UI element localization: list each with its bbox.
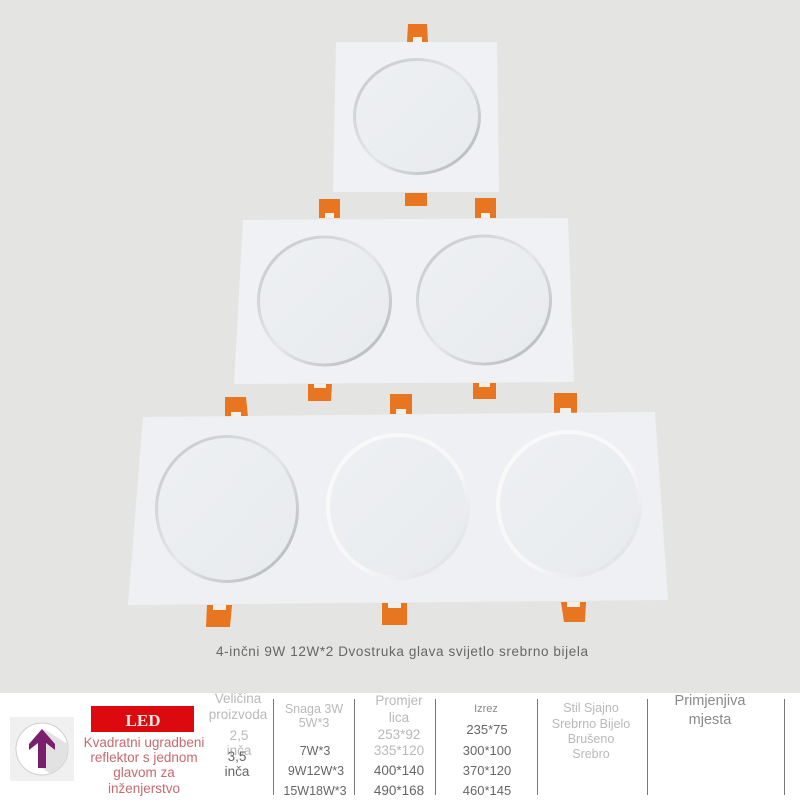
column: product size: inča — [225, 764, 250, 779]
lamp: triple head — [128, 393, 668, 627]
column: face diameter: 253*92 — [378, 727, 420, 742]
column: face diameter — [374, 693, 424, 798]
product description: inženjerstvo — [108, 781, 180, 796]
clip tabs — [206, 393, 586, 627]
column: cutout: 300*100 — [463, 743, 511, 758]
column: product size: inča — [227, 743, 252, 758]
column: product size: proizvoda — [209, 707, 268, 722]
column: applicable places: mjesta — [689, 712, 732, 728]
product caption: 4-inčni 9W 12W*2 Dvostruka glava svijetlo srebrno bijela — [216, 644, 588, 659]
column: style: Srebro — [572, 747, 610, 761]
column: product size: 3,5 — [228, 749, 246, 764]
lamp: double head — [234, 198, 574, 401]
bottom spec strip — [0, 691, 800, 800]
column: cutout: 235*75 — [466, 722, 508, 737]
column: product size: 2,5 — [230, 728, 248, 743]
clip tabs — [405, 24, 428, 206]
column: cutout — [463, 703, 511, 798]
column: style — [552, 701, 630, 761]
product description: glavom za — [113, 765, 175, 780]
column: cutout: Izrez — [474, 703, 498, 715]
column: power — [283, 702, 347, 798]
lamp: single head — [333, 24, 499, 206]
product description: reflektor s jednom — [90, 750, 198, 765]
column: applicable places — [675, 693, 746, 728]
column: face diameter: 400*140 — [374, 763, 424, 778]
column: product size: Veličina — [215, 691, 262, 706]
column: cutout: 460*145 — [463, 783, 511, 798]
column: power: 7W*3 — [300, 744, 330, 758]
product description — [84, 735, 204, 796]
LED red label — [91, 706, 194, 732]
column: cutout: 370*120 — [463, 763, 511, 778]
icon: up arrow badge — [10, 717, 74, 781]
column: power: 5W*3 — [299, 716, 329, 730]
column: style: Stil Sjajno — [563, 701, 619, 715]
column: power: 9W12W*3 — [288, 764, 344, 778]
column dividers — [273, 699, 785, 795]
product description: Kvadratni ugradbeni — [84, 735, 204, 750]
column: face diameter: 490*168 — [374, 783, 424, 798]
LED red label: LED — [126, 711, 160, 730]
column: face diameter: 335*120 — [374, 743, 424, 758]
column: face diameter: Promjer — [375, 693, 423, 708]
column: applicable places: Primjenjiva — [675, 693, 746, 709]
column: power: 15W18W*3 — [283, 784, 347, 798]
column: style: Brušeno — [568, 732, 614, 746]
column: face diameter: lica — [389, 710, 410, 725]
column: style: Srebrno Bijelo — [552, 717, 630, 731]
column: power: Snaga 3W — [285, 702, 343, 716]
clip tabs — [308, 198, 496, 401]
column: product size — [209, 691, 268, 779]
